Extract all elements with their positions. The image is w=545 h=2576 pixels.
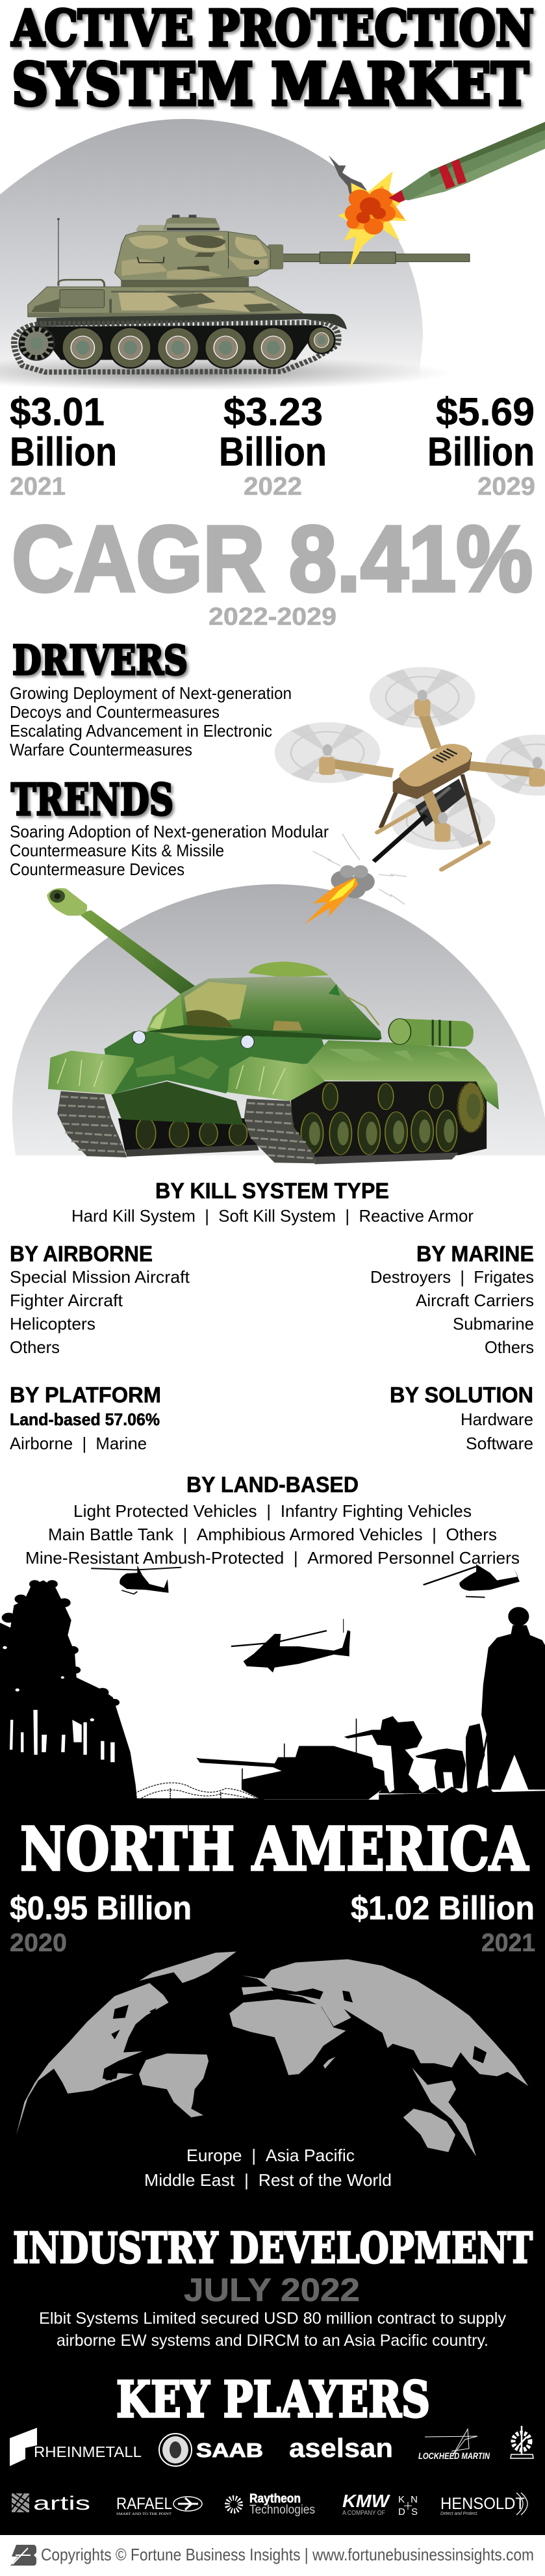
logo: KMW: A COMPANY OF <box>342 2510 385 2517</box>
logo: Saab <box>159 2434 263 2466</box>
text: drivers list <box>10 683 292 759</box>
logo: Hensoldt: Detect and Protect. <box>440 2512 478 2516</box>
segment: marine <box>370 1242 534 1357</box>
hero backdrop: grey dome <box>0 119 423 377</box>
segment: airborne: Others <box>10 1337 60 1357</box>
segment: airborne: BY AIRBORNE <box>10 1242 153 1267</box>
icon: drone body and arms <box>319 690 545 842</box>
icon: barrel and muzzle <box>47 888 209 1006</box>
text: other regions <box>144 2146 392 2190</box>
segment: marine: BY MARINE <box>416 1242 534 1267</box>
black background: regional panel <box>0 1800 545 2535</box>
text: trends list: Countermeasure Kits & Missile <box>10 841 224 860</box>
heading: trends: TRENDS <box>11 774 173 825</box>
stat: North America 2020 <box>10 1889 192 1957</box>
logo: Artis: artis <box>33 2493 90 2514</box>
logo: KMW: KMW <box>342 2491 391 2511</box>
text: trends list: Countermeasure Devices <box>10 860 184 879</box>
text: development detail <box>39 2309 507 2350</box>
icon: Eurasia <box>242 1959 528 2086</box>
icon: tree line <box>0 1580 137 1802</box>
logo: KMW: DS <box>398 2506 418 2517</box>
segment: kill system type: BY KILL SYSTEM TYPE <box>155 1179 389 1203</box>
stat: 2021: $3.01 <box>10 390 105 434</box>
text: other regions: Europe | Asia Pacific <box>186 2146 355 2165</box>
stat: North America 2021: 2021 <box>481 1929 535 1957</box>
stat: 2021: 2021 <box>10 473 66 501</box>
logo: Rafael: SMART AND TO THE POINT <box>116 2512 172 2516</box>
logos: key players row 1 <box>10 2426 533 2466</box>
logo: Raytheon Technologies <box>227 2492 315 2517</box>
icon: fenders <box>48 1051 325 1101</box>
segment: land-based <box>25 1473 520 1568</box>
text: drivers list: Warfare Countermeasures <box>10 740 192 759</box>
segment: marine: Destroyers | Frigates <box>370 1267 534 1287</box>
icon: antenna <box>57 218 60 286</box>
icon: headlights <box>133 1031 254 1048</box>
segment: land-based: Light Protected Vehicles | Infantry Fighting Vehicles <box>73 1501 472 1521</box>
segment: platform: Airborne | Marine <box>10 1434 147 1453</box>
text: drivers list: Escalating Advancement in Electronic <box>10 721 272 741</box>
icon: helicopter right <box>424 1564 520 1597</box>
segment: platform <box>10 1383 161 1453</box>
logo: emblem <box>511 2426 533 2458</box>
segment: marine: Submarine <box>453 1314 534 1334</box>
icon: lakes and inland seas <box>105 1988 487 2081</box>
icon: battle tank silhouette <box>196 1718 385 1800</box>
logo: KMW: KN <box>398 2494 418 2505</box>
icon: Fortune Business Insights logo <box>10 2545 36 2566</box>
CAGR period: 2022-2029 <box>209 603 336 631</box>
segment: solution: Hardware <box>461 1410 533 1429</box>
segment: solution: Software <box>466 1434 533 1453</box>
logo: Rheinmetall: RHEINMETALL <box>34 2443 142 2460</box>
icon: drone legs and gun <box>374 774 488 869</box>
icon: Madagascar <box>323 2057 335 2069</box>
stat: 2022: 2022 <box>244 473 302 501</box>
icon: hull <box>105 1031 499 1125</box>
icon: cupola <box>249 962 329 977</box>
logo: Artis <box>12 2493 90 2514</box>
segment: platform: Land-based 57.06% <box>10 1410 160 1429</box>
stat: North America 2021 <box>351 1889 535 1957</box>
icon: Americas <box>16 1983 169 2135</box>
segment: land-based: Mine-Resistant Ambush-Protected | Armored Personnel Carriers <box>25 1548 520 1568</box>
panel: segmentation text <box>10 1179 534 1568</box>
segment: solution: BY SOLUTION <box>390 1383 533 1408</box>
logo: Rafael: RAFAEL <box>116 2495 172 2513</box>
stat: 2022 <box>219 390 327 501</box>
icon: attack helicopter <box>231 1619 350 1672</box>
segment: airborne: Helicopters <box>10 1314 95 1334</box>
icon: turret <box>146 977 382 1040</box>
heading: drivers: DRIVERS <box>12 637 188 684</box>
text: development detail: Elbit Systems Limited secured USD 80 million contract to supply <box>39 2309 507 2328</box>
icon: helicopter left <box>91 1566 181 1594</box>
icon: tank turret <box>115 231 270 289</box>
text: other regions: Middle East | Rest of the World <box>144 2170 392 2190</box>
stat: North America 2021: $1.02 Billion <box>351 1889 535 1926</box>
segment: kill system type: Hard Kill System | Soft Kill System | Reactive Armor <box>71 1206 474 1226</box>
icon: Australia <box>403 2109 455 2152</box>
stat: 2029 <box>427 390 535 501</box>
title <box>11 0 534 119</box>
icon: muzzle blast <box>304 834 407 925</box>
icon: tank cupola <box>136 215 221 232</box>
date: July 2022: JULY 2022 <box>184 2272 360 2308</box>
stat: 2029: 2029 <box>477 473 535 501</box>
stat: North America 2020: $0.95 Billion <box>10 1889 192 1926</box>
segment: airborne <box>10 1242 190 1357</box>
segment: land-based: Main Battle Tank | Amphibious Armored Vehicles | Others <box>48 1525 497 1544</box>
icon: running gear <box>118 1081 487 1164</box>
logos: key players row 2 <box>12 2491 527 2517</box>
logo: Saab: SAAB <box>196 2439 263 2462</box>
stat: 2022: $3.23 <box>223 390 323 434</box>
segment: marine: Aircraft Carriers <box>416 1291 534 1310</box>
stat: North America 2020: 2020 <box>10 1929 67 1957</box>
text: drivers list: Growing Deployment of Next-generation <box>10 683 292 703</box>
segment: solution <box>390 1383 533 1453</box>
icon: fuel drum <box>388 1019 474 1047</box>
segment: land-based: BY LAND-BASED <box>186 1473 359 1497</box>
logo: KMW <box>342 2491 418 2517</box>
icon: soldiers <box>344 1607 545 1802</box>
segment: platform: BY PLATFORM <box>10 1383 161 1408</box>
text: drivers list: Decoys and Countermeasures <box>10 702 220 722</box>
second grey dome <box>12 884 545 1155</box>
icon: Greenland <box>139 1952 236 1983</box>
icon: barbed wire <box>135 1783 259 1801</box>
text: trends list: Soaring Adoption of Next-generation Modular <box>10 822 329 841</box>
logo: Raytheon Technologies: Technologies <box>249 2503 315 2517</box>
segment: airborne: Special Mission Aircraft <box>10 1267 190 1287</box>
battlefield silhouette <box>0 1564 545 1804</box>
icon: incoming missile <box>388 122 545 203</box>
heading: key players: KEY PLAYERS <box>116 2371 430 2428</box>
text: trends list <box>10 822 329 879</box>
logo: Lockheed Martin <box>418 2429 490 2461</box>
green tank illustration <box>47 888 499 1164</box>
logo: Raytheon Technologies: Raytheon <box>249 2492 301 2506</box>
segment: marine: Others <box>485 1337 534 1357</box>
hero illustration: tank hit by missile <box>0 122 545 390</box>
stat: 2021 <box>10 390 117 501</box>
icon: Southeast Asia islands <box>412 2068 476 2157</box>
icon: tank fender and tracks <box>14 313 347 372</box>
text: development detail: airborne EW systems and DIRCM to an Asia Pacific country. <box>57 2332 488 2350</box>
icon: drone rotors <box>275 667 545 850</box>
drone illustration <box>275 667 545 925</box>
icon: tank gun barrel <box>268 244 470 269</box>
icon: tank road wheels <box>19 326 335 368</box>
icon: tracks <box>57 1091 314 1163</box>
icon: Africa <box>229 1999 346 2075</box>
segment: airborne: Fighter Aircraft <box>10 1291 123 1310</box>
logo: Hensoldt: HENSOLDT <box>440 2495 525 2513</box>
world globe map <box>16 1952 528 2157</box>
stat: 2021: Billion <box>10 430 117 475</box>
icon: smoke trail <box>329 155 367 200</box>
icon: South America <box>139 2053 209 2118</box>
footer <box>10 2545 534 2566</box>
icon: tank rear rail and hull <box>28 280 303 317</box>
logo: Rafael <box>116 2495 202 2516</box>
logo: Aselsan: aselsan <box>289 2433 393 2463</box>
stat: 2022: Billion <box>219 430 327 475</box>
logo: Rheinmetall <box>10 2428 142 2466</box>
stat: 2029: $5.69 <box>436 390 535 434</box>
logo: Lockheed Martin: LOCKHEED MARTIN <box>418 2451 490 2461</box>
icon: explosion <box>338 171 409 270</box>
segment: kill system type <box>71 1179 474 1226</box>
